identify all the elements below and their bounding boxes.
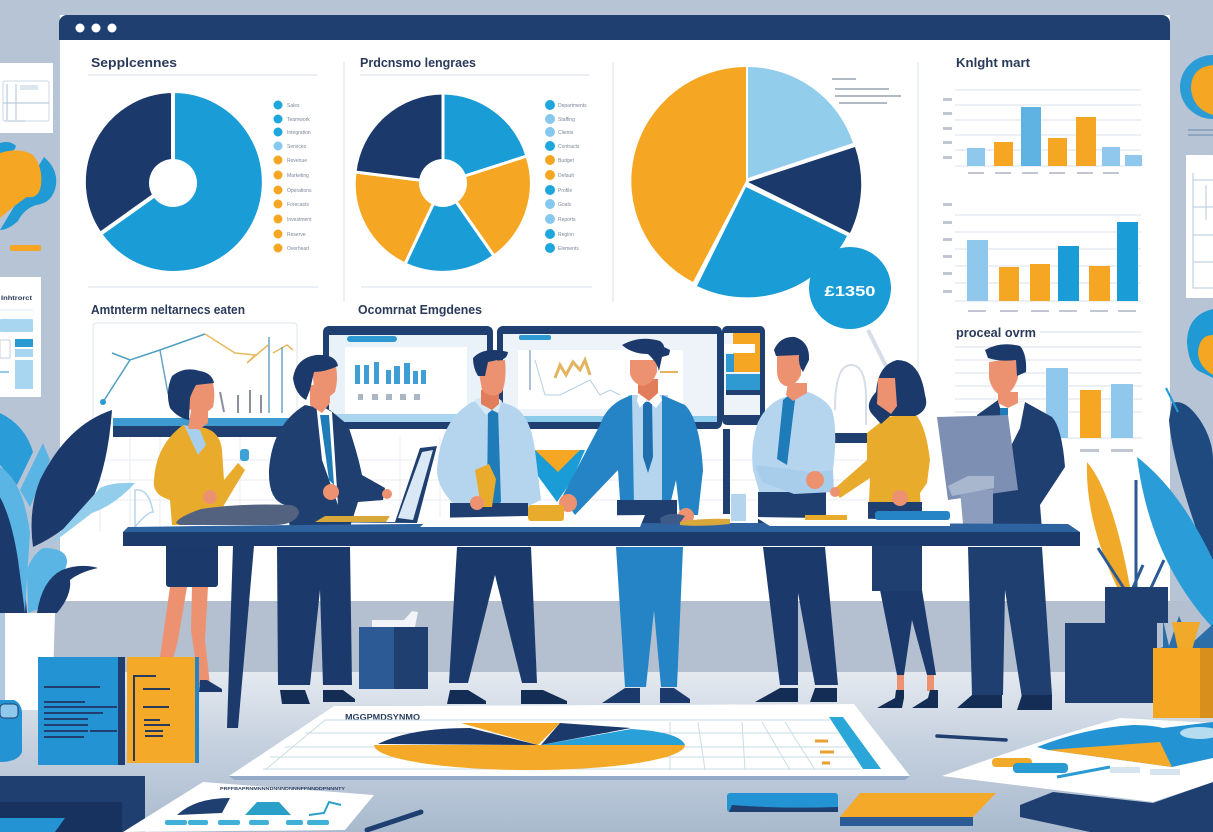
legend: second pie: Elements [558, 246, 579, 252]
heading: bar chart three: proceal ovrm [956, 325, 1036, 340]
legend: second pie [545, 100, 587, 253]
pie chart: large pie [631, 67, 861, 297]
legend: first pie: Sales [287, 103, 300, 109]
person: woman in yellow jacket [154, 369, 249, 692]
legend: first pie: Services [287, 144, 307, 150]
legend: second pie: Clients [558, 130, 574, 136]
legend: second pie: Profile [558, 188, 572, 194]
floor chart sheet [229, 704, 910, 780]
person: man holding tablet monitor [937, 344, 1065, 710]
legend: first pie: Overhead [287, 246, 309, 252]
legend: first pie: Marketing [287, 173, 309, 179]
bar chart: lower right [955, 332, 1142, 452]
device: left floor gadget [0, 700, 22, 762]
legend: second pie: Contracts [558, 144, 580, 150]
pen: floor [937, 736, 1006, 740]
heading: second pie: Prdcnsmo lengraes [360, 55, 476, 70]
heading: bar chart one: Knlght mart [956, 55, 1031, 70]
person: man in navy suit [269, 355, 392, 704]
line chart panel [93, 323, 325, 437]
person: man in light blue shirt [437, 350, 567, 704]
monitor stand [723, 429, 730, 514]
legend: first pie: Reserve [287, 232, 306, 238]
floor sheet bottom: PRFFBAPRNMNNNDNNNDNNNFFNNDDPNNNTY [220, 786, 345, 791]
legend: second pie: Budget [558, 158, 574, 164]
legend: first pie: Revenue [287, 158, 307, 164]
heading: monitors: Ocomrnat Emgdenes [358, 302, 482, 317]
panel: wall dashboard [59, 15, 1170, 601]
legend: first pie: Investment [287, 217, 312, 223]
monitor: small side screen [722, 326, 765, 425]
bar chart: top right [943, 90, 1142, 174]
wall cards left and right [0, 55, 1213, 397]
legend: second pie: Reports [558, 217, 576, 223]
binder: blue [38, 657, 125, 765]
wall cards left and right: Inhtrorct [1, 295, 33, 302]
book: blue [727, 793, 838, 812]
legend: second pie: Staffing [558, 117, 575, 123]
legend: first pie: Operations [287, 188, 312, 194]
bar chart: middle right [943, 203, 1141, 312]
binder: orange [127, 657, 199, 763]
heading: first pie: Sepplcennes [91, 55, 177, 70]
table with items [123, 446, 1080, 728]
device: grey organiser [176, 504, 299, 525]
legend: first pie: Forecasts [287, 202, 309, 208]
heading: line chart: Amtnterm neltarnecs eaten [91, 302, 245, 317]
box: navy crate [1065, 623, 1157, 703]
legend: second pie: Goals [558, 202, 572, 208]
legend: first pie: Teamwork [287, 117, 310, 123]
person: woman in yellow blazer [830, 360, 938, 708]
floor chart sheet: MGGPMDSYNMO [345, 713, 420, 722]
legend: large pie notes [832, 78, 901, 104]
feather and pencil holder [1087, 462, 1168, 623]
pen: lower [367, 812, 421, 830]
legend: second pie: Region [558, 232, 574, 238]
laptop [300, 446, 437, 523]
person: man with crossed arms [752, 337, 838, 702]
box: document box on floor [359, 611, 428, 689]
monitor: bar dashboard [323, 326, 493, 429]
callout: amount badge [809, 247, 891, 329]
chart sheet behind the team [70, 330, 910, 532]
person: man in blue suit [559, 339, 703, 703]
legend: second pie: Departments [558, 103, 587, 109]
box: dark lower left [0, 776, 145, 832]
plant: left [0, 410, 135, 710]
pie chart: five segment donut [354, 93, 531, 272]
legend: first pie: Integration [287, 130, 311, 136]
papers on table [420, 494, 950, 527]
floor report sheet right [942, 718, 1213, 832]
callout: amount badge: £1350 [824, 283, 876, 300]
cup: yellow holder [1153, 616, 1213, 718]
legend: first pie [274, 100, 312, 252]
pie chart: two segment donut [84, 91, 264, 273]
floor sheet bottom [123, 782, 374, 832]
monitor: line dashboard [497, 326, 722, 429]
legend: second pie: Default [558, 173, 574, 179]
book: orange [840, 793, 996, 826]
plant: right [1137, 388, 1213, 628]
